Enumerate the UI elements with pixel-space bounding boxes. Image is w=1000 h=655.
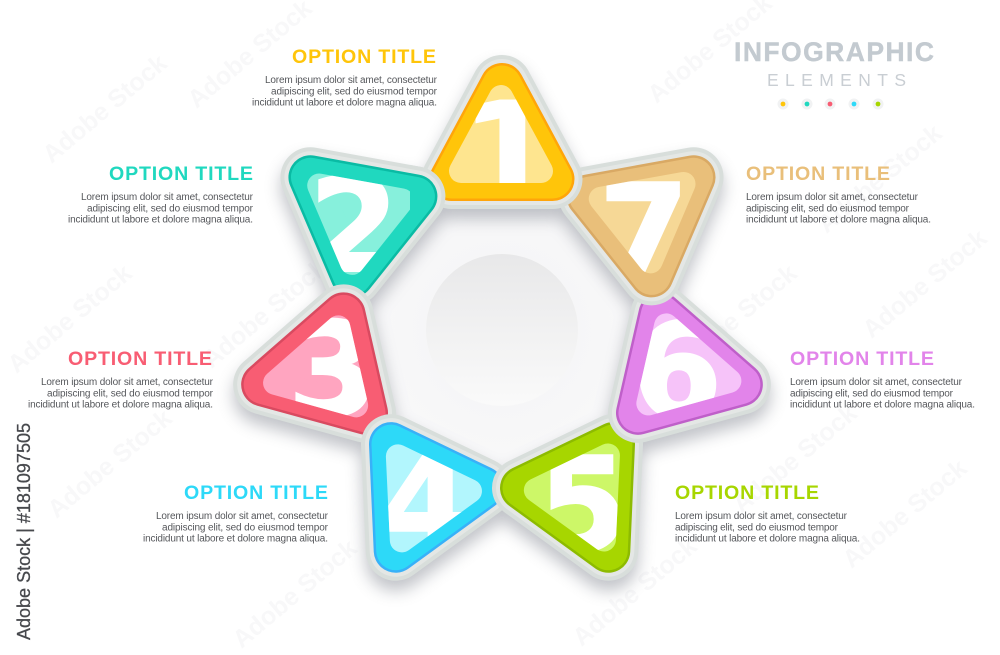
- triangle 2: teal: [279, 138, 415, 302]
- text block 6: incididunt ut labore et dolore magna aliqua.: [790, 400, 975, 410]
- heading: infographic elements: ELEMENTS: [767, 70, 906, 90]
- text block 7: [746, 163, 931, 226]
- watermark pattern: Adobe Stock: [857, 224, 992, 344]
- triangle 7: tan: [589, 138, 725, 308]
- watermark pattern: Adobe Stock: [197, 254, 332, 374]
- watermark pattern: Adobe Stock: [837, 454, 972, 574]
- text block 2: incididunt ut labore et dolore magna aliqua.: [68, 214, 253, 226]
- triangle 1: yellow: [452, 73, 558, 236]
- text block 3: incididunt ut labore et dolore magna aliqua.: [28, 400, 213, 410]
- text block 2: [68, 163, 254, 226]
- text block 7: incididunt ut labore et dolore magna aliqua.: [746, 214, 931, 226]
- text block 2: adipiscing elit, sed do eiusmod tempor: [87, 203, 254, 214]
- text block 3: adipiscing elit, sed do eiusmod tempor: [47, 388, 214, 399]
- text block 2: Lorem ipsum dolor sit amet, consectetur: [81, 192, 254, 203]
- text block 5: OPTION TITLE: [675, 482, 819, 504]
- triangle 5: green: [522, 429, 654, 581]
- text block 4: Lorem ipsum dolor sit amet, consectetur: [156, 511, 329, 522]
- text block 1: incididunt ut labore et dolore magna aliqua.: [252, 98, 437, 108]
- text block 1: Lorem ipsum dolor sit amet, consectetur: [265, 75, 438, 86]
- text block 4: incididunt ut labore et dolore magna aliqua.: [143, 534, 328, 544]
- triangle 6: purple: [632, 295, 752, 447]
- text block 5: adipiscing elit, sed do eiusmod tempor: [675, 522, 839, 533]
- watermark pattern: Adobe Stock: [42, 404, 177, 524]
- digit 7: 7: [599, 156, 689, 308]
- text block 5: incididunt ut labore et dolore magna aliqua.: [675, 534, 860, 544]
- text block 6: [790, 348, 975, 410]
- heading: infographic elements: [734, 37, 934, 90]
- digit 2: 2: [309, 150, 399, 302]
- digit 5: 5: [538, 429, 628, 581]
- watermark pattern: Adobe Stock: [812, 119, 947, 239]
- digit 6: 6: [632, 295, 722, 447]
- watermark pattern: Adobe Stock: [567, 532, 702, 652]
- text block 5: [675, 482, 860, 544]
- centre disc: [426, 254, 578, 406]
- teal corner overlapping yellow: [410, 165, 446, 214]
- text block 7: adipiscing elit, sed do eiusmod tempor: [746, 203, 910, 214]
- text block 1: adipiscing elit, sed do eiusmod tempor: [271, 86, 438, 97]
- text block 4: OPTION TITLE: [184, 482, 328, 504]
- drop shadows: [252, 95, 752, 583]
- text block 5: Lorem ipsum dolor sit amet, consectetur: [675, 511, 848, 522]
- triangle 3: red: [252, 294, 378, 446]
- text block 3: [28, 348, 214, 410]
- text block 7: Lorem ipsum dolor sit amet, consectetur: [746, 192, 919, 203]
- text block 1: [252, 46, 438, 108]
- text block 6: Lorem ipsum dolor sit amet, consectetur: [790, 377, 963, 388]
- text block 2: OPTION TITLE: [109, 163, 253, 185]
- digit 3: 3: [288, 294, 378, 446]
- watermark pattern: Adobe Stock: [2, 259, 137, 379]
- legend dots: [778, 98, 884, 110]
- watermark pattern: Adobe Stock: [227, 534, 362, 654]
- heading: infographic elements: INFOGRAPHIC: [734, 37, 934, 67]
- text block 4: adipiscing elit, sed do eiusmod tempor: [162, 522, 329, 533]
- text block 1: OPTION TITLE: [292, 46, 436, 68]
- text block 3: Lorem ipsum dolor sit amet, consectetur: [41, 377, 214, 388]
- digit 4: 4: [381, 427, 471, 579]
- text block 6: adipiscing elit, sed do eiusmod tempor: [790, 388, 954, 399]
- triangle 4: cyan: [350, 427, 482, 579]
- text block 7: OPTION TITLE: [746, 163, 890, 185]
- text block 6: OPTION TITLE: [790, 348, 934, 370]
- hub background: [327, 155, 677, 505]
- digit 1: 1: [460, 73, 558, 236]
- watermark pattern: Adobe Stock: [667, 259, 802, 379]
- text block 3: OPTION TITLE: [68, 348, 212, 370]
- stock credit: Adobe Stock | #181097505: [14, 423, 34, 640]
- watermark pattern: Adobe Stock: [727, 399, 862, 519]
- text block 4: [143, 482, 329, 544]
- watermark pattern: Adobe Stock: [37, 49, 172, 169]
